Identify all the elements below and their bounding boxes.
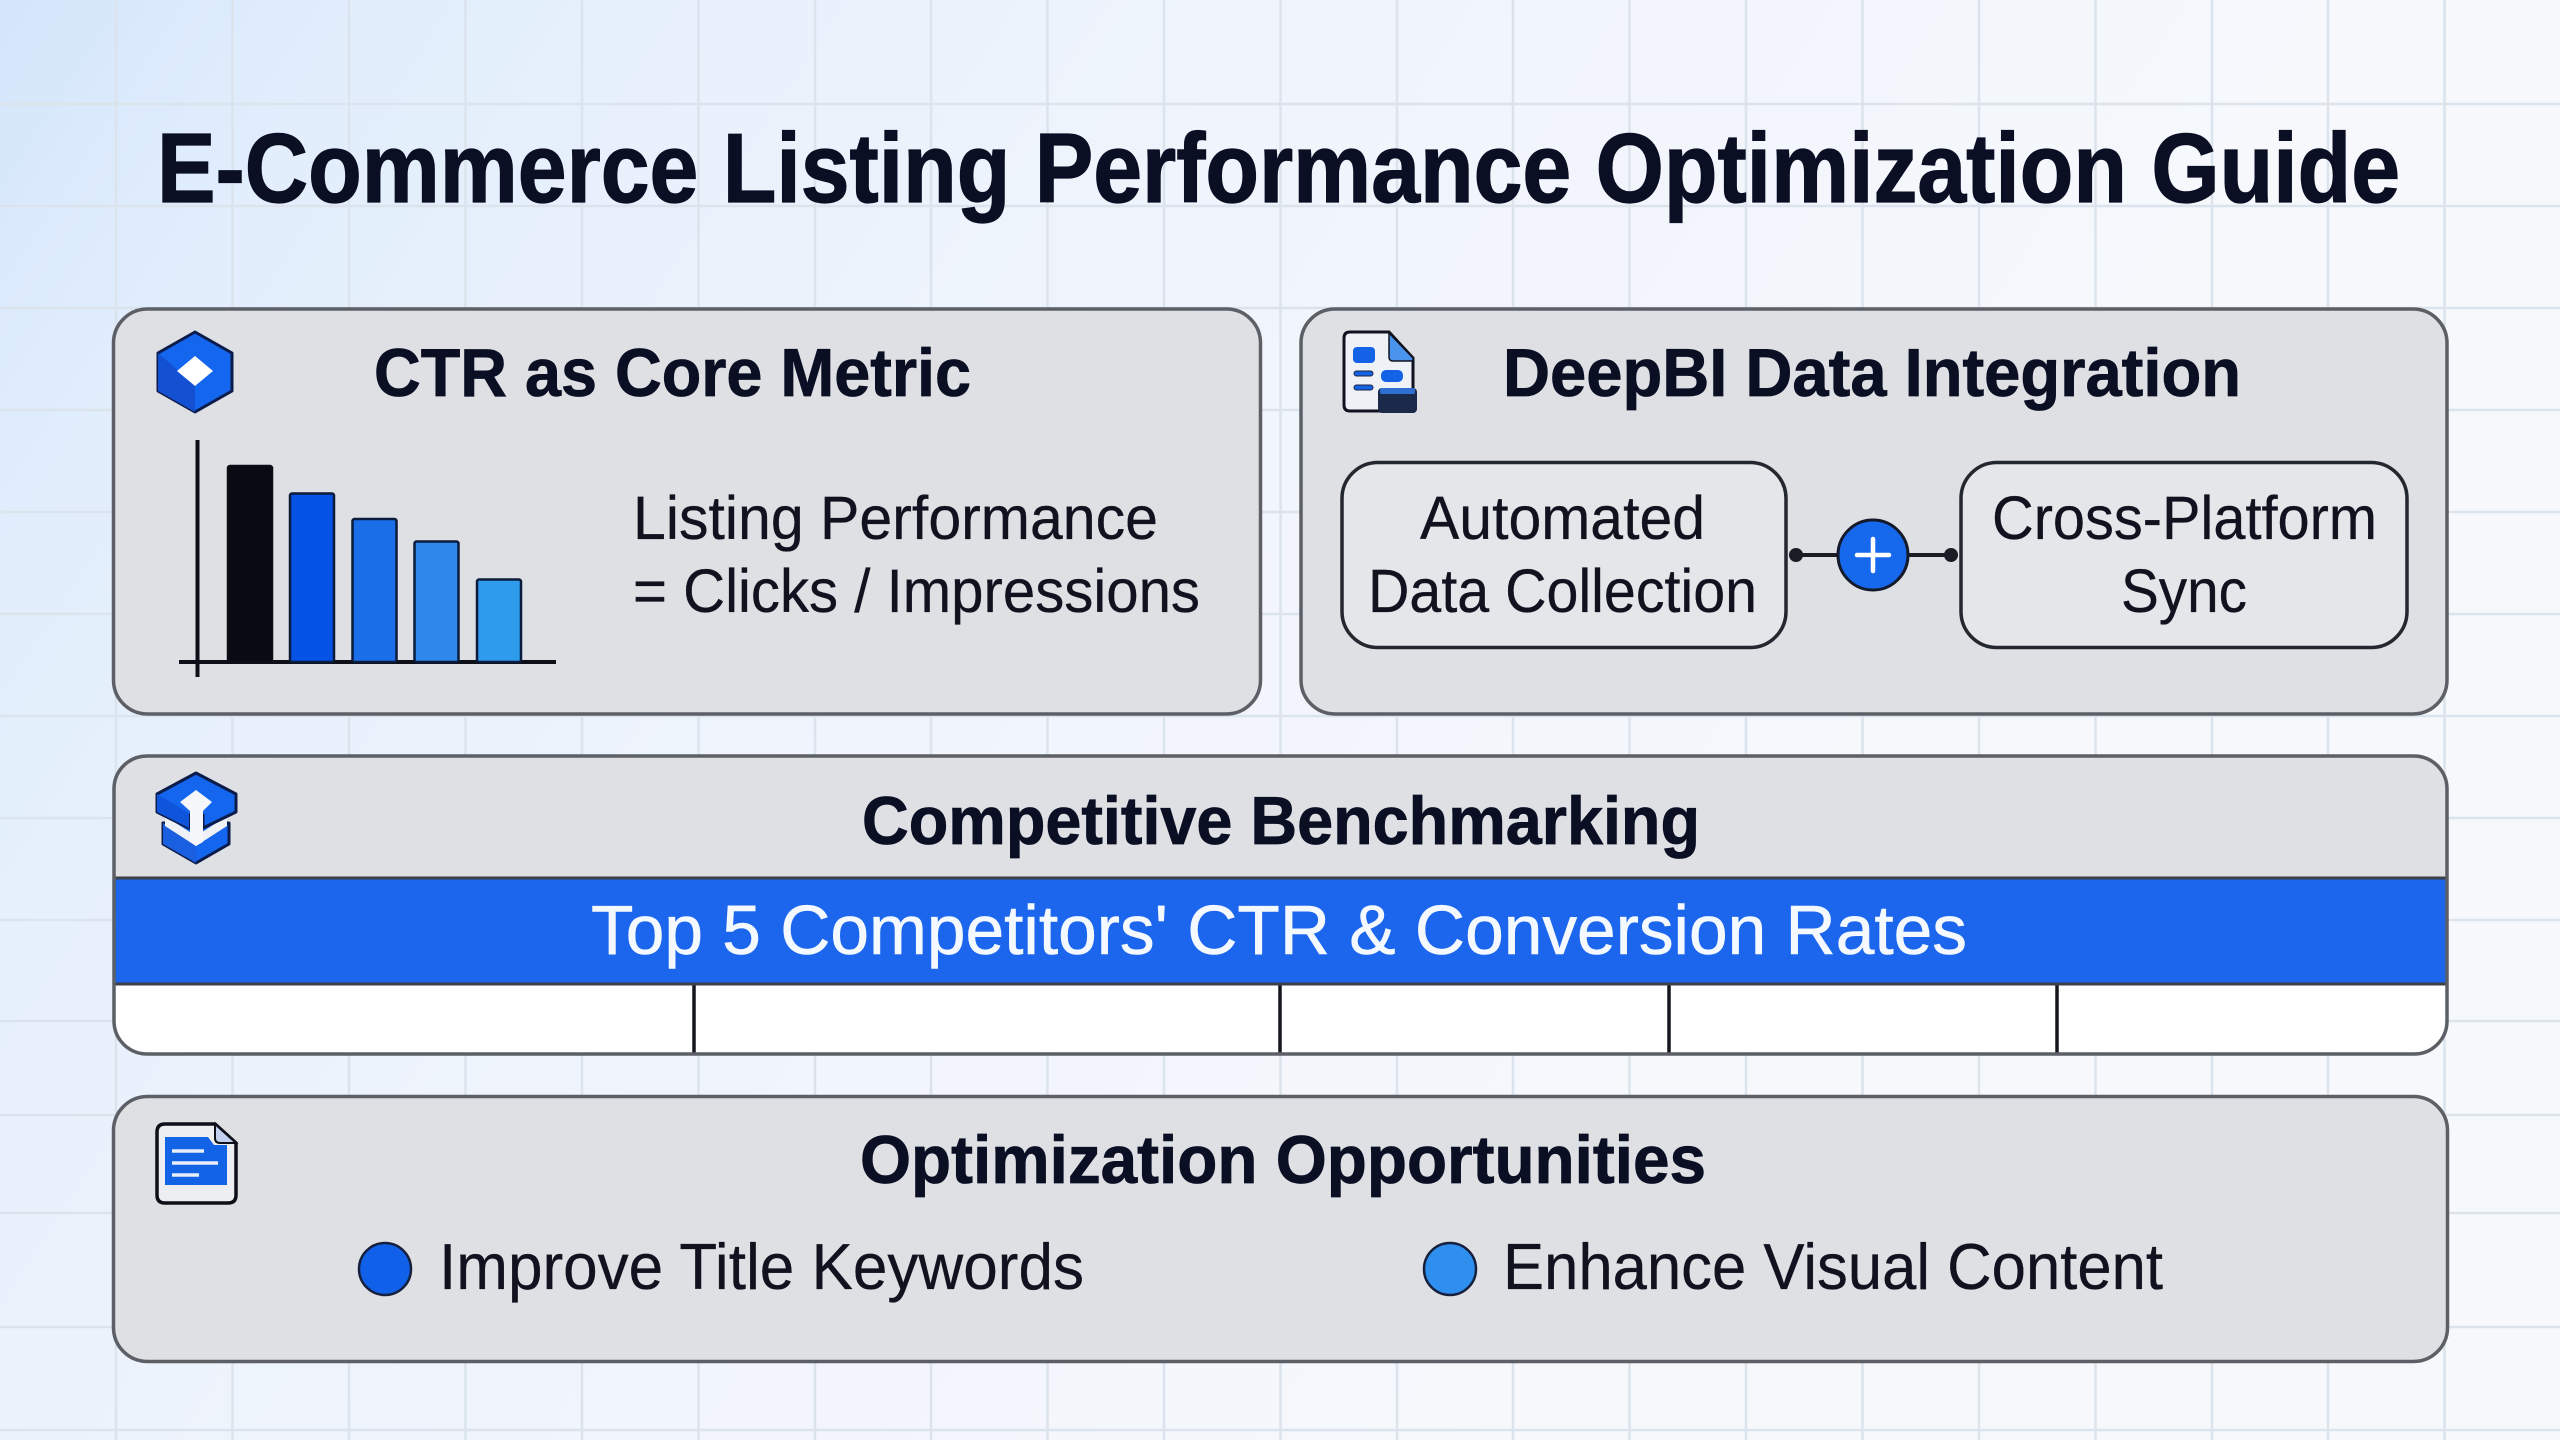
bar 2 xyxy=(290,494,334,662)
bar 3 xyxy=(352,519,396,662)
table row xyxy=(114,984,2447,1054)
formula text: = Clicks / Impressions xyxy=(633,557,1200,625)
heading: Optimization Opportunities: Optimization Opportunities xyxy=(860,1122,1706,1198)
connector with plus xyxy=(1789,520,1958,590)
bar 5 xyxy=(477,580,521,662)
box: cross-platform sync: Cross-Platform xyxy=(1992,484,2377,552)
formula text xyxy=(633,484,1200,625)
icon: data document xyxy=(1344,332,1417,413)
panel: CTR as Core Metric xyxy=(114,309,1260,714)
panel: DeepBI Data Integration xyxy=(1301,309,2447,714)
heading: Competitive Benchmarking: Competitive Benchmarking xyxy=(862,783,1700,859)
box: automated data collection: Automated xyxy=(1420,484,1705,552)
formula text: Listing Performance xyxy=(633,484,1158,552)
box: automated data collection: Data Collection xyxy=(1368,557,1757,625)
bar 1 xyxy=(228,466,272,662)
heading: CTR as Core Metric: CTR as Core Metric xyxy=(374,335,971,411)
box: cross-platform sync xyxy=(1961,462,2407,648)
icon: document xyxy=(157,1124,236,1203)
icon: hexagon cube xyxy=(158,332,232,412)
box: cross-platform sync: Sync xyxy=(2121,557,2247,625)
heading: DeepBI Data Integration: DeepBI Data Integration xyxy=(1503,335,2241,411)
list item: improve title keywords: Improve Title Keywords xyxy=(439,1230,1084,1303)
box: automated data collection xyxy=(1342,462,1786,648)
list item: enhance visual content: Enhance Visual Content xyxy=(1503,1230,2163,1303)
blue band: Top 5 Competitors' CTR & Conversion Rates xyxy=(591,891,1967,969)
bar 4 xyxy=(414,542,458,662)
blue band xyxy=(114,878,2447,984)
bar chart xyxy=(179,440,556,677)
panel: Optimization Opportunities xyxy=(114,1096,2448,1362)
icon: open box xyxy=(157,773,236,863)
panel: Competitive Benchmarking xyxy=(114,756,2447,1054)
